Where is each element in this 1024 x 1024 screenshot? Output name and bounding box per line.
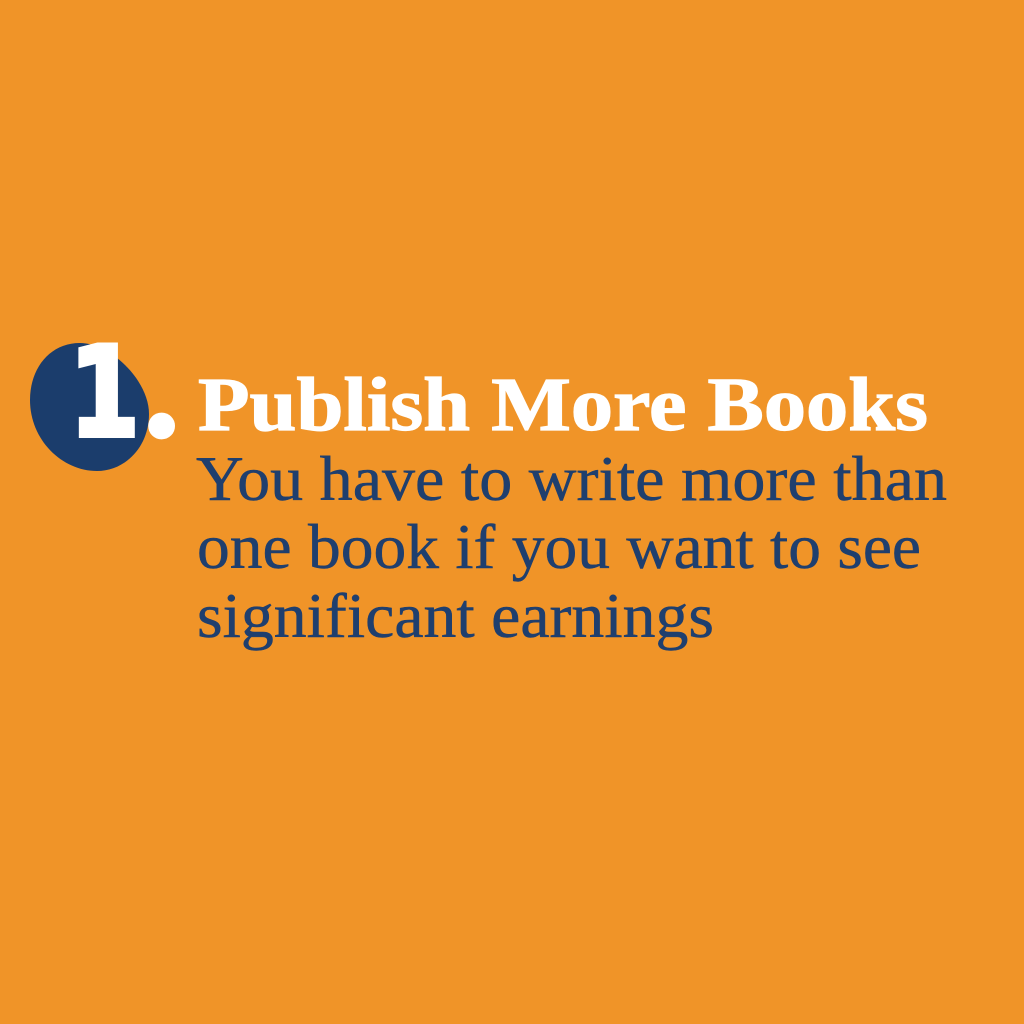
- badge blob: [30, 343, 149, 471]
- number badge: 1.: [30, 290, 182, 473]
- body text: significant earnings: [197, 581, 714, 651]
- body text: one book if you want to see: [197, 512, 921, 582]
- numeral dot: .: [141, 290, 182, 473]
- body text: [196, 444, 947, 651]
- heading: Publish More Books: [198, 363, 928, 447]
- body text: You have to write more than: [196, 444, 947, 514]
- numeral one: 1: [69, 321, 140, 465]
